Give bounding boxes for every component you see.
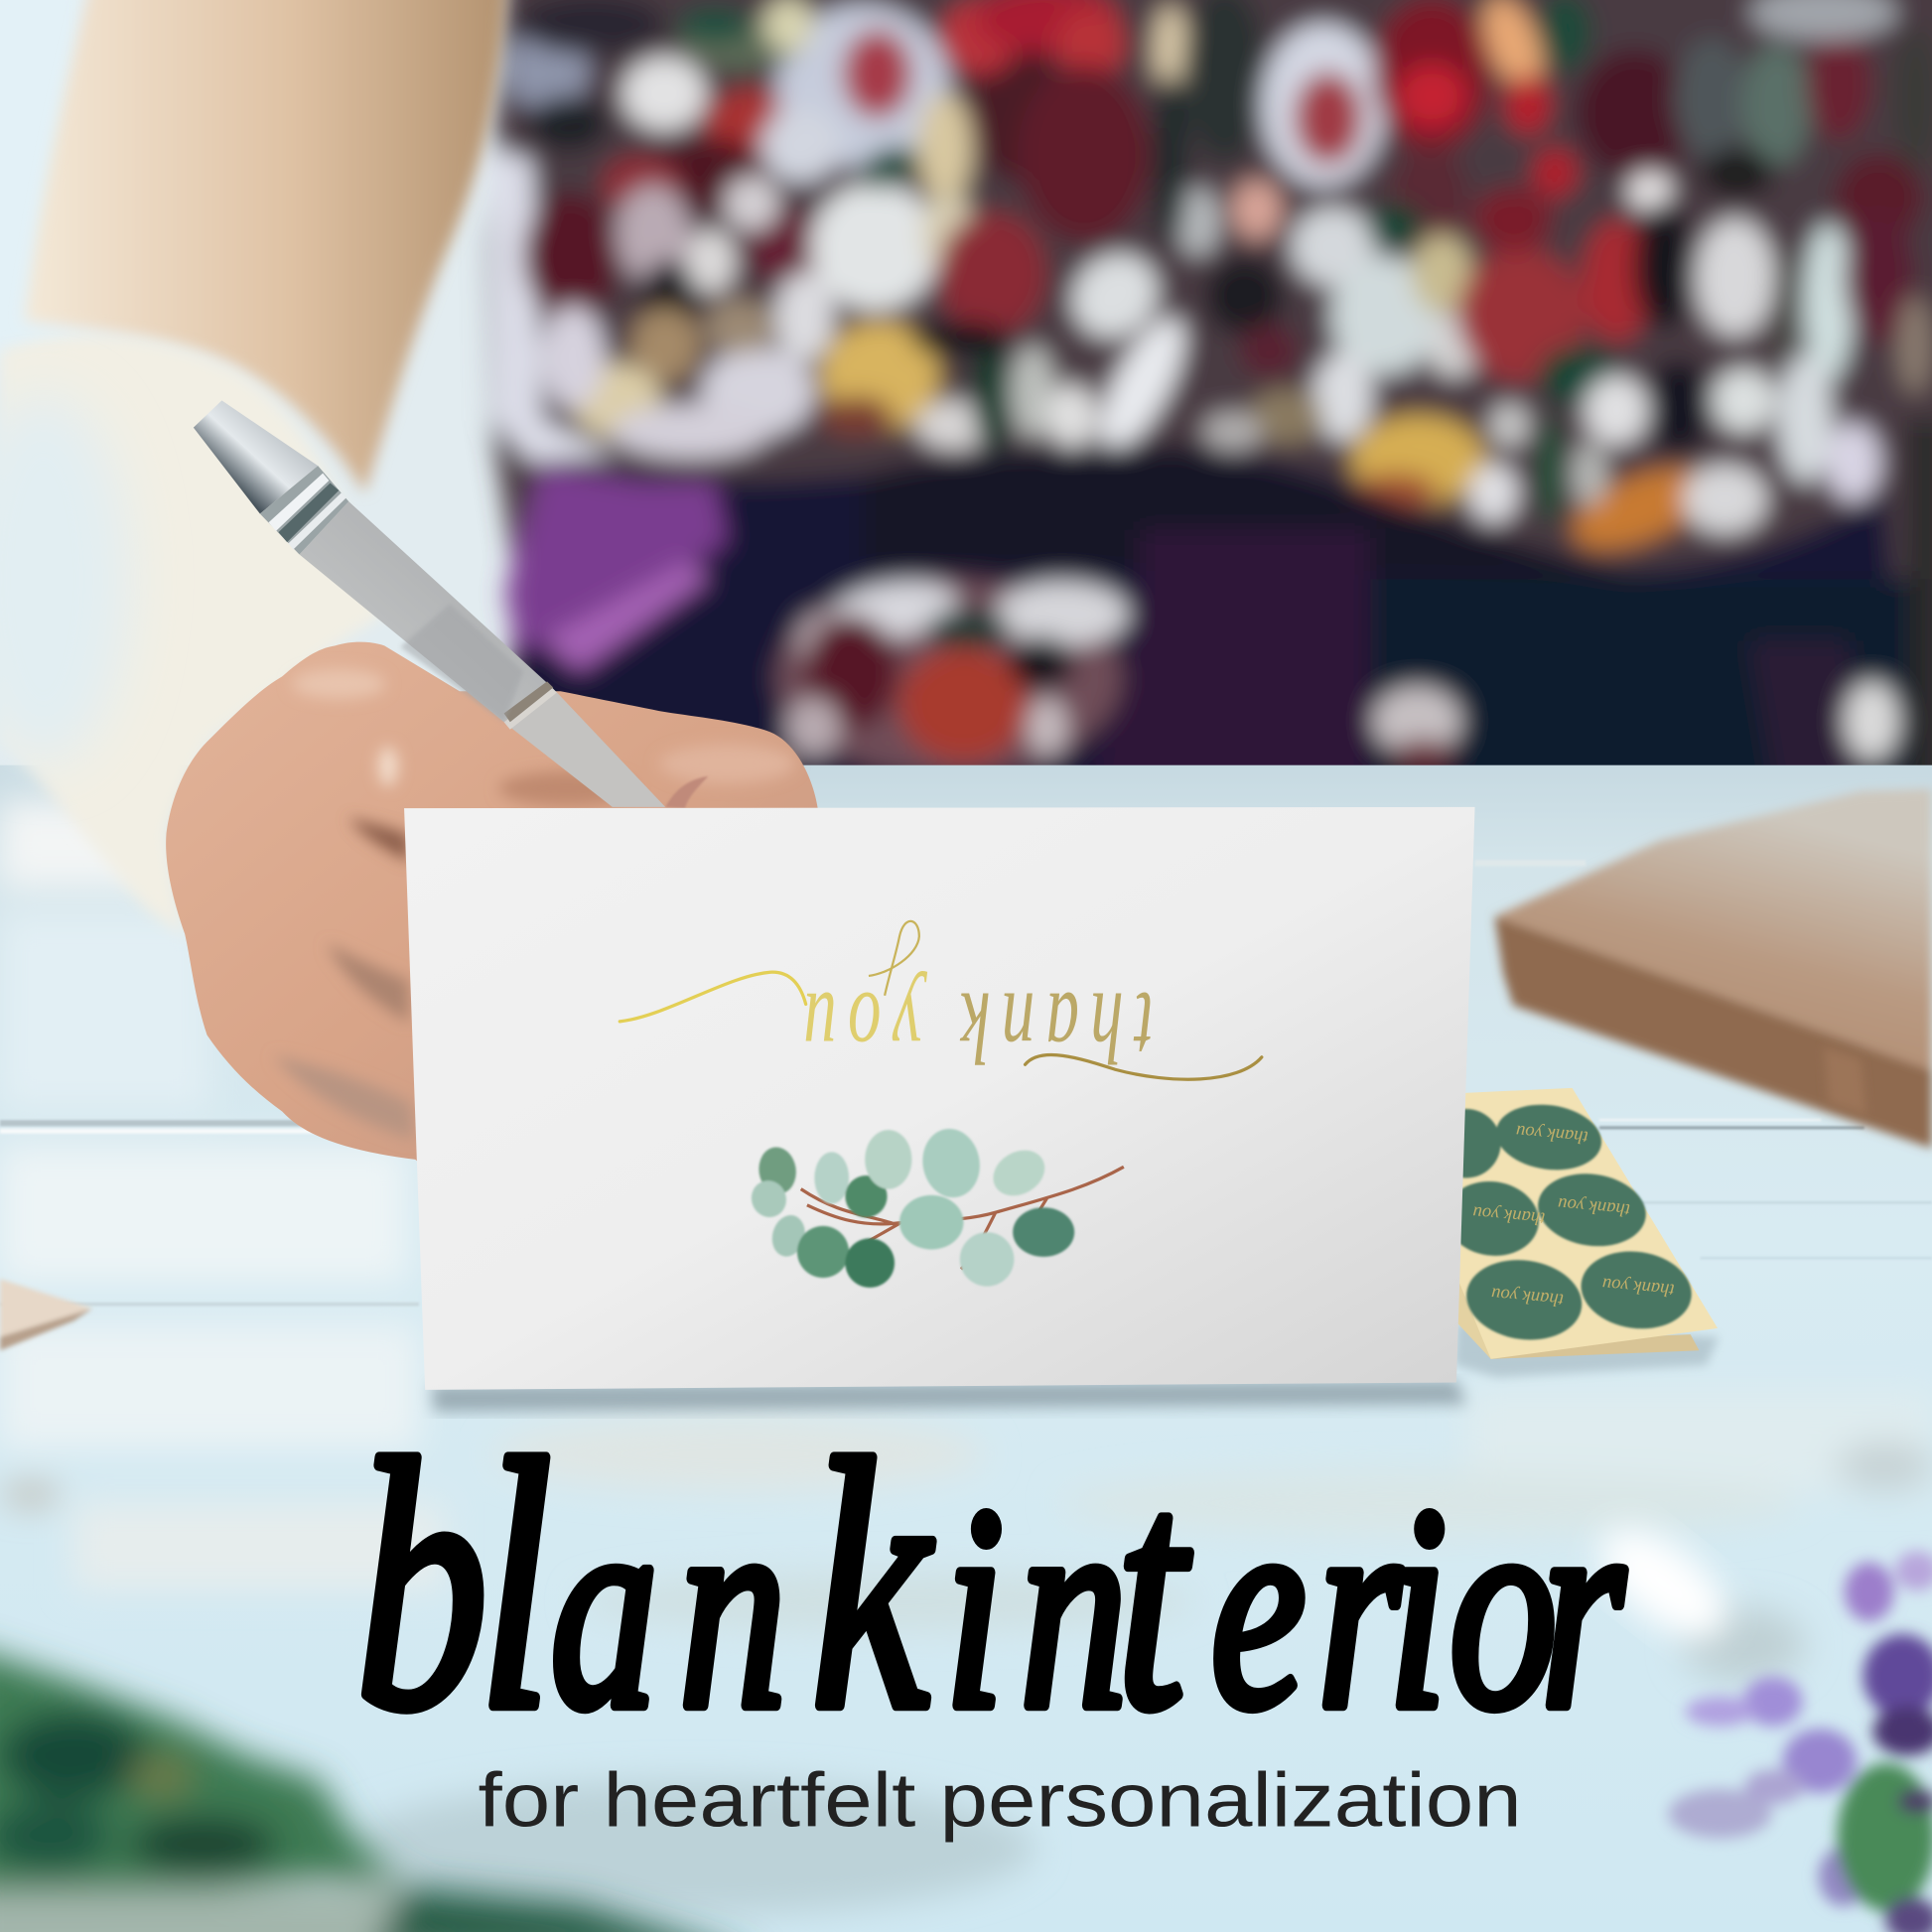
leaves — [747, 1124, 1074, 1288]
main title: blank interior: n — [1021, 1448, 1128, 1768]
main title: blank interior: k — [811, 1388, 935, 1783]
sticker sheets — [1432, 1088, 1719, 1378]
floral pattern blobs — [505, 0, 1932, 788]
branch — [801, 1167, 1124, 1269]
sticker thank-you lettering — [1472, 1121, 1675, 1311]
main title: blank interior: e — [1211, 1448, 1306, 1768]
main title: blank interior: n — [679, 1448, 786, 1768]
writing hand — [166, 642, 818, 1182]
gold foil thank you — [620, 921, 1262, 1085]
main title: blank interior: i — [1388, 1448, 1448, 1768]
lavender — [1668, 1552, 1932, 1932]
sticker circles — [1432, 1098, 1697, 1347]
corner of paper at left edge — [0, 1279, 92, 1350]
white table top — [0, 765, 1932, 1932]
wall and backdrop — [0, 0, 1932, 788]
sticker thank-you lettering: thank you — [1490, 1283, 1565, 1311]
eucalyptus sprig — [747, 1124, 1124, 1288]
main title: blank interior: r — [1317, 1448, 1405, 1768]
sticker thank-you lettering: thank you — [1472, 1202, 1546, 1229]
subtitle: for heartfelt personalization — [479, 1757, 1522, 1843]
finger gap by pen tip — [665, 776, 709, 808]
cream knit sleeve — [0, 335, 382, 936]
floral dress, out of focus — [486, 0, 1932, 813]
card face — [404, 807, 1475, 1390]
glare on table — [1583, 1509, 1744, 1658]
card shadow — [431, 1380, 1466, 1412]
wood plank highlights — [0, 801, 1932, 1916]
main title: blank interior: r — [1541, 1448, 1628, 1768]
lower floral panel — [776, 574, 1898, 776]
sticker thank-you lettering: thank you — [1601, 1274, 1675, 1301]
gold foil thank you: thank you — [803, 971, 1154, 1085]
sticker thank-you lettering: thank you — [1557, 1193, 1631, 1220]
brown envelope stack — [1494, 788, 1932, 1149]
envelope side sheen — [1824, 1047, 1866, 1115]
white lavender edge of dress — [490, 148, 617, 462]
knuckle creases and shading — [274, 669, 794, 1140]
moss — [0, 1645, 763, 1932]
main title: blank interior: a — [551, 1448, 658, 1768]
greeting card — [404, 807, 1475, 1412]
main title: blank interior: l — [479, 1388, 552, 1783]
main title: blank interior: t — [1117, 1409, 1194, 1777]
main title: blank interior: o — [1449, 1448, 1557, 1768]
sticker thank-you lettering: thank you — [1515, 1121, 1588, 1148]
bare upper arm — [25, 0, 507, 492]
main title: blank interior: b — [355, 1388, 487, 1783]
silver pen — [194, 400, 665, 807]
main title: blank interior: i — [944, 1448, 1004, 1768]
main title: blank interior — [355, 1388, 1628, 1783]
purple waist sash — [513, 461, 1902, 765]
foreground moss and flowers, out of focus — [0, 1552, 1932, 1932]
